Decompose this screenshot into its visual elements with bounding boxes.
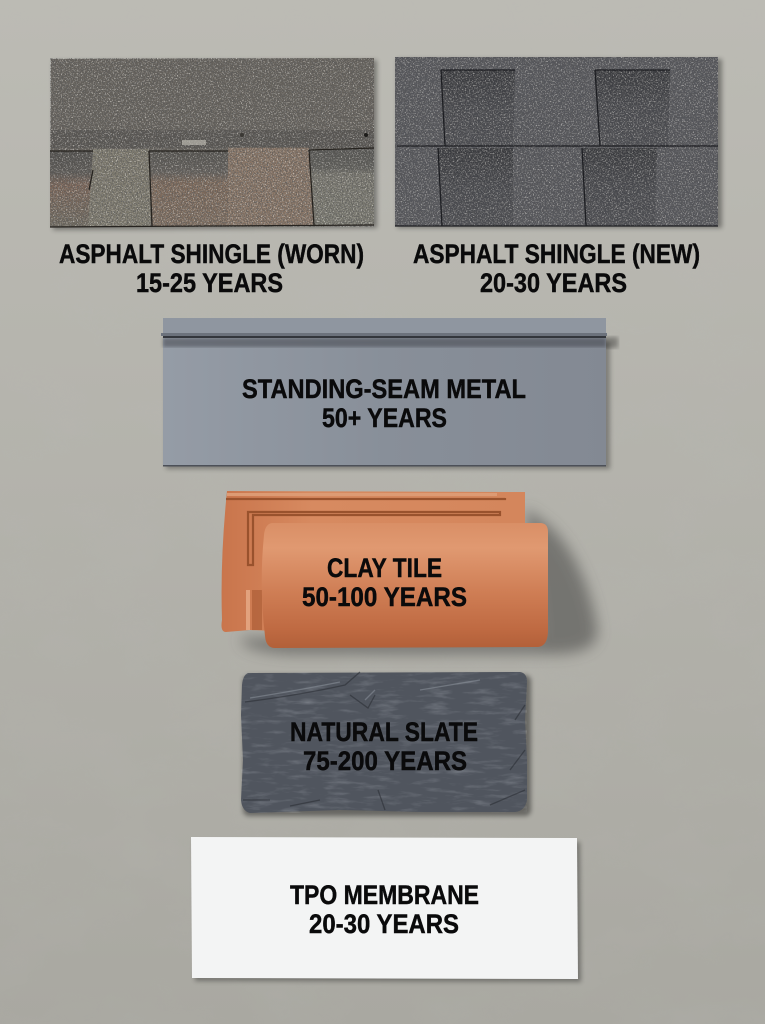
back tile [222,491,525,632]
panel: new asphalt shingle [395,57,722,228]
label: TPO membrane: 20-30 YEARS [309,909,459,939]
label: natural slate [290,717,478,776]
front cylinder tile [262,523,548,648]
label: worn asphalt shingle: ASPHALT SHINGLE (WORN) [59,239,364,269]
panel: clay tile [222,491,597,654]
white membrane sheet [191,837,578,979]
metal sheet [163,338,606,466]
label: natural slate: 75-200 YEARS [303,746,467,776]
label: standing-seam metal [242,374,526,433]
label: TPO membrane [290,880,479,939]
shingle body worn [50,58,374,227]
label: clay tile: CLAY TILE [327,553,442,583]
panel: natural slate [241,672,531,816]
label: clay tile [302,553,467,612]
label: natural slate: NATURAL SLATE [290,717,478,747]
label: standing-seam metal: STANDING-SEAM METAL [242,374,526,404]
label: new asphalt shingle [413,239,700,298]
label: TPO membrane: TPO MEMBRANE [290,880,479,910]
label: new asphalt shingle: 20-30 YEARS [480,268,627,298]
label: new asphalt shingle: ASPHALT SHINGLE (NEW) [413,239,700,269]
label: worn asphalt shingle [59,239,364,298]
slate stone [241,672,527,813]
label: clay tile: 50-100 YEARS [302,582,467,612]
standing seam [163,318,606,333]
panel: worn asphalt shingle [50,58,377,230]
panel: TPO membrane [191,837,581,982]
label: worn asphalt shingle: 15-25 YEARS [136,268,283,298]
panel: standing-seam metal [161,318,618,469]
label: standing-seam metal: 50+ YEARS [322,403,447,433]
shingle body new [395,57,718,226]
